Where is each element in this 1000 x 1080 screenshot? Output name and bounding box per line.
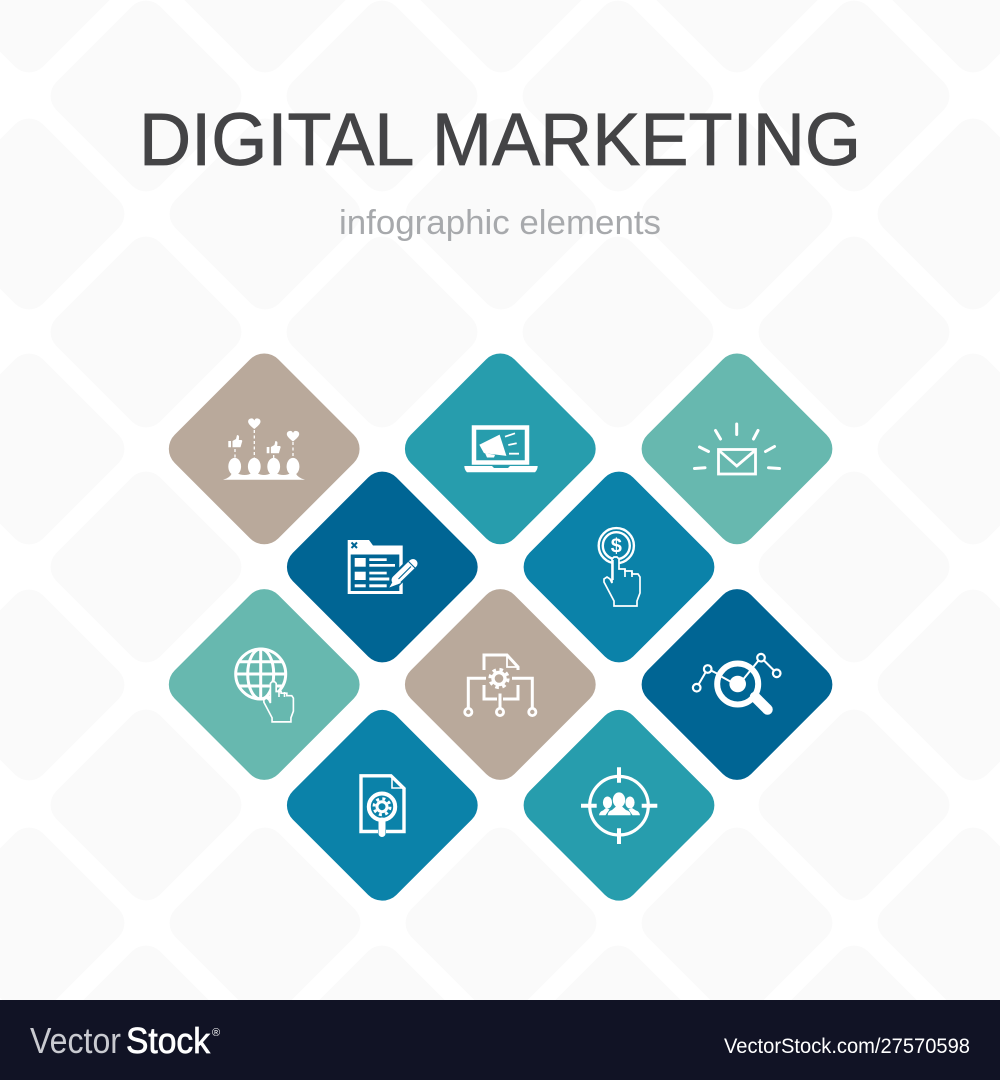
icon: crosshair with people bbox=[581, 767, 657, 844]
panel: analytics bbox=[633, 581, 841, 788]
icon: browser form with pencil bbox=[348, 540, 416, 594]
icon: audience with likes and hearts bbox=[223, 418, 305, 480]
footer url: VectorStock.com/27570598 bbox=[724, 1035, 970, 1058]
footer logo: Stock bbox=[126, 1020, 211, 1061]
footer logo: ® bbox=[212, 1027, 220, 1039]
panel: seo document bbox=[279, 702, 486, 909]
icon: laptop with megaphone bbox=[464, 428, 538, 472]
icon: globe and pointer hand bbox=[236, 649, 293, 722]
subtitle: infographic elements bbox=[339, 204, 661, 242]
panel: technical process bbox=[397, 581, 604, 788]
panel: target audience bbox=[515, 702, 723, 909]
footer logo bbox=[30, 1020, 220, 1061]
icon: document with magnifier and gear bbox=[361, 776, 404, 834]
panel: pay per click bbox=[515, 463, 723, 671]
panel: laptop advertising bbox=[397, 345, 604, 553]
title: DIGITAL MARKETING bbox=[139, 98, 861, 181]
panel: email bbox=[633, 345, 841, 553]
panel: web search bbox=[161, 581, 368, 788]
icon: dollar coin and pointer hand: $ bbox=[611, 536, 622, 558]
panel: social likes bbox=[161, 345, 368, 553]
icon: magnifier with data nodes bbox=[693, 654, 780, 710]
icon: document with gear and circuit lines bbox=[465, 655, 536, 716]
footer bar bbox=[0, 1000, 1000, 1080]
icon: shining envelope bbox=[694, 424, 780, 474]
icon: dollar coin and pointer hand bbox=[599, 528, 640, 606]
footer logo: Vector bbox=[30, 1020, 121, 1061]
panel: content form bbox=[279, 463, 486, 671]
